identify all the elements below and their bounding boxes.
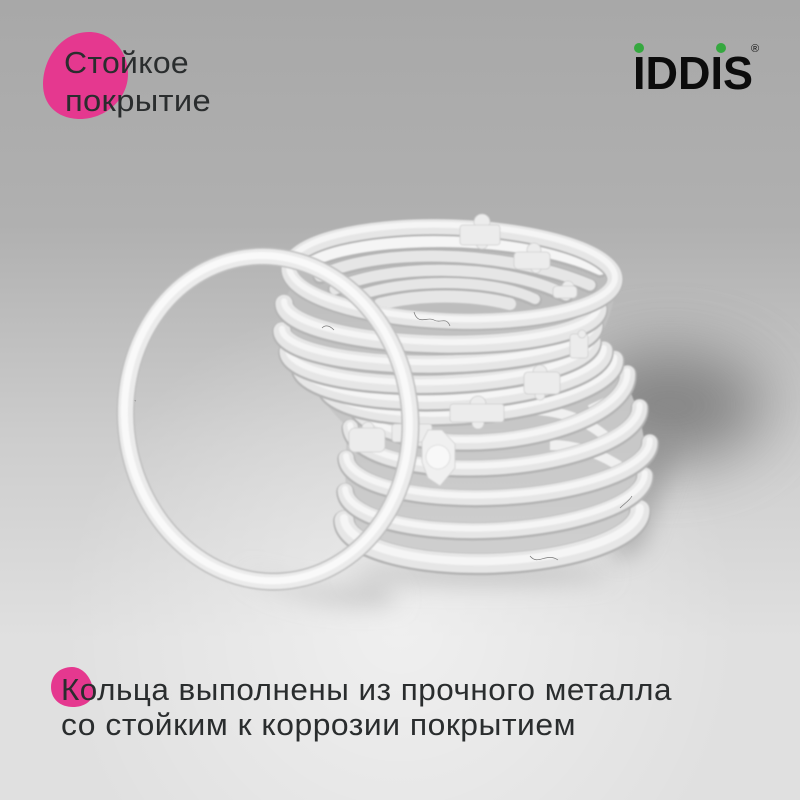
ring J (345, 473, 647, 539)
ring H (350, 405, 643, 478)
ring B (282, 323, 595, 368)
clasp 6 (450, 396, 504, 429)
clasp 3 (553, 281, 577, 298)
pink blob behind caption (51, 667, 93, 707)
heading: покрытие (65, 83, 211, 118)
cast shadows (240, 350, 765, 603)
clasp 8 (349, 422, 385, 452)
ring K base (344, 508, 642, 569)
back stripes on the right (530, 362, 640, 470)
caption: Кольца выполнены из прочного металла (61, 672, 672, 707)
ring stack (282, 214, 652, 569)
stack body shade (284, 250, 646, 566)
ring clasps (349, 214, 588, 452)
logo: IDDIS: ® (751, 43, 759, 55)
caption (61, 672, 672, 742)
ring C (288, 339, 593, 390)
clasp 4 (570, 330, 588, 358)
top ring opening (291, 223, 613, 325)
caption: со стойким к коррозии покрытием (61, 707, 576, 742)
clasp 5 (524, 365, 560, 400)
ring I (346, 440, 652, 506)
hairline marks on rings (130, 312, 632, 560)
ring D (300, 348, 606, 409)
front ring (104, 237, 431, 600)
logo: IDDIS: IDDIS (633, 47, 753, 99)
ring E (325, 357, 618, 427)
pink blob behind heading (43, 32, 128, 119)
floor glow (0, 200, 800, 800)
front ring clasp (422, 430, 455, 486)
clasp 7 (392, 416, 432, 442)
heading (64, 45, 211, 118)
heading: Стойкое (64, 45, 189, 80)
top ring (287, 219, 617, 328)
ring G (352, 371, 632, 454)
clasp 2 (514, 243, 550, 273)
clasp 1 (460, 214, 500, 249)
ring A (283, 301, 598, 348)
interior back arcs (312, 241, 600, 304)
